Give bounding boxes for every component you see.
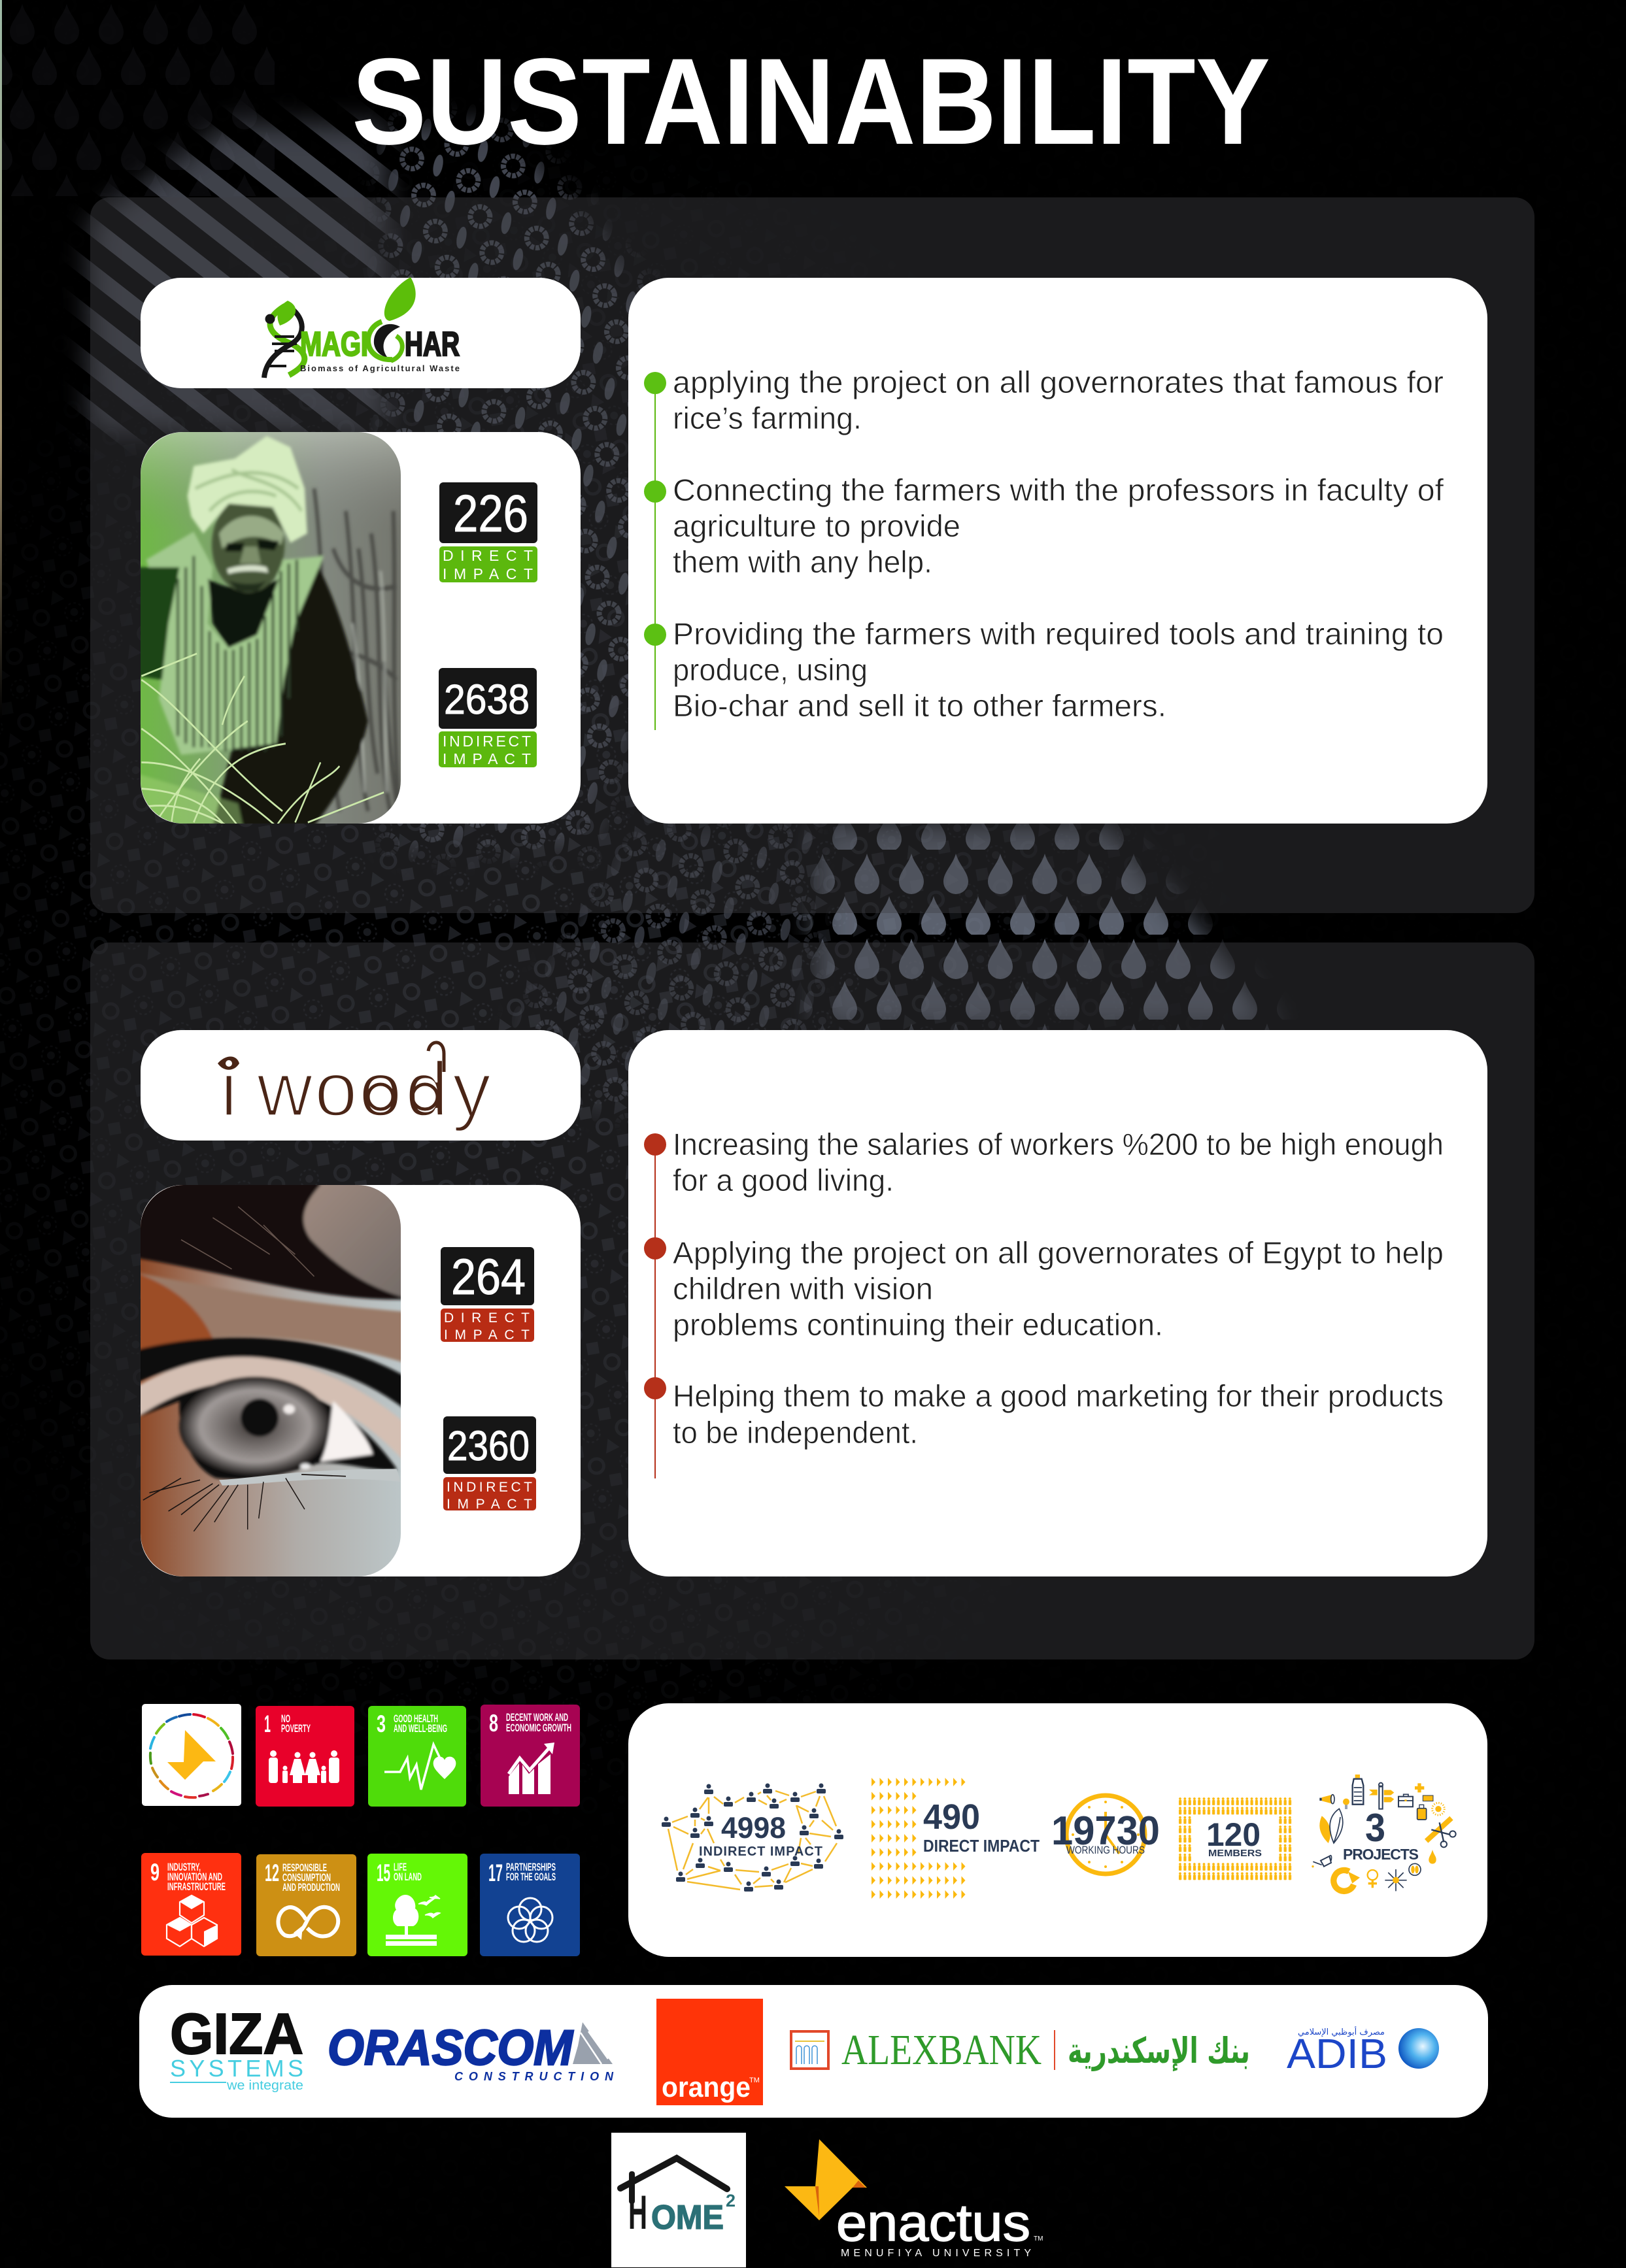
SDG tile 1: no poverty bbox=[256, 1706, 354, 1807]
bullet text 2: Applying the project on all governorates of Egypt to help bbox=[673, 1235, 1444, 1270]
bullet text 3 bbox=[673, 1378, 1444, 1450]
SDG tile 17: partnerships: FOR THE GOALS bbox=[506, 1871, 556, 1883]
logo: Home squared: H bbox=[628, 2186, 647, 2239]
stat: 19730 working hours: WORKING HOURS bbox=[1066, 1844, 1145, 1856]
SDG tile 8: decent work: ECONOMIC GROWTH bbox=[506, 1722, 571, 1734]
bullet text 2: agriculture to provide bbox=[673, 509, 960, 543]
stat: 2638 indirect impact bbox=[439, 668, 537, 767]
SDG tile 15: life on land: 15 bbox=[377, 1859, 390, 1886]
logo tagline: Biomass of Agricultural Waste bbox=[300, 363, 460, 373]
logo eye bbox=[218, 1056, 239, 1070]
bullet text 1: rice’s farming. bbox=[673, 401, 862, 435]
photo: eye bbox=[137, 1181, 422, 1576]
bullet text 3: Helping them to make a good marketing for their products bbox=[673, 1378, 1444, 1413]
stat: 4998 indirect impact network: INDIRECT IMPACT bbox=[699, 1844, 822, 1859]
bullet text 2: children with vision bbox=[673, 1271, 933, 1306]
logo card: iWoody bbox=[141, 1030, 581, 1141]
logo: Orascom: ORASCOM bbox=[328, 2020, 574, 2076]
enactus origami mark bbox=[785, 2139, 867, 2220]
stat: 120 members: 120 bbox=[1206, 1816, 1261, 1853]
stat: 490 direct impact: 490 bbox=[923, 1797, 980, 1837]
logo: Home squared bbox=[611, 2133, 746, 2267]
network lines bbox=[668, 1791, 837, 1890]
bullet text 2: problems continuing their education. bbox=[673, 1307, 1163, 1342]
SDG tile 9: industry: INNOVATION AND bbox=[167, 1871, 222, 1883]
logo: ADIB bbox=[1287, 2026, 1439, 2077]
bullet text 2 bbox=[673, 473, 1444, 579]
SDG tile 9: industry bbox=[141, 1853, 241, 1956]
SDG tile 17: partnerships: 17 bbox=[488, 1859, 503, 1886]
panel: iWoody project bbox=[137, 1030, 1487, 1576]
SDG tile 8: decent work bbox=[481, 1705, 580, 1807]
logo: Orascom: CONSTRUCTION bbox=[454, 2070, 614, 2083]
stat: 226 direct impact: 226 bbox=[453, 484, 528, 542]
bullet text 3: produce, using bbox=[673, 652, 868, 687]
panel: Magichar project bbox=[137, 277, 1487, 833]
logo inner rings and hook bbox=[368, 1042, 444, 1109]
logo: Alexbank: ALEXBANK bbox=[841, 2026, 1042, 2074]
bullet text 1 bbox=[673, 1127, 1444, 1197]
logo: Giza Systems bbox=[170, 2001, 303, 2093]
text card: iWoody sustainability plan bbox=[628, 1030, 1487, 1576]
stats card bbox=[628, 1703, 1487, 1957]
logo wordmark end: HAR bbox=[405, 325, 460, 363]
logo: Alexbank: بنك الإسكندرية bbox=[1068, 2030, 1250, 2071]
page background with textile pattern bbox=[0, 0, 1284, 1699]
logo: Home squared: OME bbox=[651, 2199, 724, 2237]
stat: 226 direct impact: DIRECT bbox=[443, 547, 533, 564]
SDG tile 12: responsible consumption: 12 bbox=[265, 1859, 279, 1886]
bullet text 3: Bio-char and sell it to other farmers. bbox=[673, 688, 1166, 723]
bullet text 1: Increasing the salaries of workers %200 to be high enough bbox=[673, 1127, 1444, 1161]
stat: 4998 indirect impact network bbox=[662, 1783, 843, 1892]
logo: Giza Systems: we integrate bbox=[226, 2078, 303, 2093]
stat: 226 direct impact: IMPACT bbox=[443, 565, 533, 582]
stat: 4998 indirect impact network: 4998 bbox=[721, 1811, 786, 1844]
SDG tile 12: responsible consumption: AND PRODUCTION bbox=[282, 1881, 340, 1893]
SDG tile 9: industry: INFRASTRUCTURE bbox=[167, 1880, 226, 1893]
logo card: Magichar bbox=[141, 277, 581, 388]
bullet text 3: Providing the farmers with required tools and training to bbox=[673, 616, 1444, 651]
bullet text 3: to be independent. bbox=[673, 1415, 918, 1450]
bullet text 2: them with any help. bbox=[673, 544, 932, 579]
stat: 264 direct impact: IMPACT bbox=[444, 1327, 530, 1342]
stat: 2360 indirect impact: IMPACT bbox=[447, 1497, 532, 1512]
SDG tile 8: decent work: 8 bbox=[489, 1710, 498, 1737]
stat: 2360 indirect impact bbox=[443, 1416, 536, 1512]
logo: Enactus Menufiya University: enactus bbox=[836, 2193, 1030, 2252]
bullet text 2: Connecting the farmers with the professors in faculty of bbox=[673, 473, 1444, 507]
logo: Giza Systems: GIZA bbox=[170, 2001, 303, 2066]
stat: 120 members bbox=[1178, 1797, 1293, 1882]
logo wordmark: MAGI bbox=[300, 325, 368, 363]
logo: ADIB: مصرف أبوظبي الإسلامي bbox=[1298, 2026, 1385, 2037]
SDG tile: enactus goals wheel bbox=[142, 1704, 241, 1806]
stat: 490 direct impact bbox=[872, 1778, 1040, 1905]
SDG tile 15: life on land: ON LAND bbox=[394, 1871, 422, 1883]
logo: Orange: orange bbox=[662, 2071, 751, 2103]
bullet text 1: applying the project on all governorates that famous for bbox=[673, 365, 1444, 399]
SDG tile 3: good health bbox=[368, 1706, 466, 1807]
SDG tile 3: good health: AND WELL-BEING bbox=[394, 1722, 447, 1735]
logo: Alexbank bbox=[791, 2026, 1250, 2074]
stat: 3 projects with icons: 3 bbox=[1365, 1806, 1385, 1850]
network people bbox=[662, 1783, 843, 1892]
text card: Magichar sustainability plan bbox=[628, 278, 1487, 824]
SDG tile 3: good health: 3 bbox=[377, 1710, 386, 1737]
stat: 2360 indirect impact: INDIRECT bbox=[447, 1480, 532, 1495]
logo leaf bbox=[384, 277, 416, 321]
logo DNA helix bbox=[264, 301, 305, 378]
logo C mark bbox=[368, 322, 402, 361]
stat: 264 direct impact bbox=[441, 1247, 534, 1342]
bullet text 1: for a good living. bbox=[673, 1163, 894, 1197]
logo wordmark: i woody bbox=[220, 1046, 491, 1133]
bullet text 2 bbox=[673, 1235, 1444, 1342]
stat card: Magichar bbox=[137, 432, 581, 833]
stat: 3 projects with icons bbox=[1312, 1775, 1456, 1891]
SDG tile 17: partnerships bbox=[480, 1854, 580, 1956]
SDG tile 12: responsible consumption: CONSUMPTION bbox=[282, 1871, 331, 1884]
stat: 490 direct impact: DIRECT IMPACT bbox=[923, 1836, 1040, 1856]
panel: iWoody background bbox=[90, 942, 1534, 1659]
SDG tiles bbox=[141, 1704, 580, 1956]
logo: Orange: TM bbox=[749, 2076, 760, 2084]
stat: 3 projects with icons: PROJECTS bbox=[1343, 1846, 1419, 1863]
stat: 2638 indirect impact: INDIRECT bbox=[443, 733, 531, 750]
SDG tile 12: responsible consumption: RESPONSIBLE bbox=[282, 1861, 327, 1874]
SDG tile 15: life on land bbox=[367, 1854, 467, 1956]
title: SUSTAINABILITY bbox=[352, 33, 1270, 170]
SDG tile 1: no poverty: NO bbox=[281, 1712, 290, 1725]
logo: ADIB: ADIB bbox=[1287, 2030, 1387, 2077]
stat: 2360 indirect impact: 2360 bbox=[447, 1422, 530, 1469]
SDG tile 12: responsible consumption bbox=[256, 1854, 356, 1956]
panel: Magichar background bbox=[90, 197, 1534, 913]
stat: 264 direct impact: DIRECT bbox=[444, 1310, 530, 1326]
SDG tile 9: industry: 9 bbox=[150, 1859, 160, 1886]
SDG tile 17: partnerships: PARTNERSHIPS bbox=[506, 1861, 556, 1873]
SDG tile 3: good health: GOOD HEALTH bbox=[394, 1712, 438, 1725]
SDG tile 9: industry: INDUSTRY, bbox=[167, 1861, 201, 1873]
logo: Enactus Menufiya University: MENUFIYA UNIVERSITY bbox=[841, 2248, 1031, 2259]
project icons bbox=[1312, 1775, 1456, 1891]
logo: Orange bbox=[656, 1999, 763, 2105]
partners card bbox=[139, 1985, 1488, 2118]
stat: 226 direct impact bbox=[439, 482, 537, 582]
logo: Home squared: 2 bbox=[726, 2191, 736, 2210]
bullet timeline bbox=[644, 1133, 666, 1478]
SDG tile 8: decent work: DECENT WORK AND bbox=[506, 1711, 568, 1724]
logo: Giza Systems: SYSTEMS bbox=[170, 2055, 303, 2082]
bullet text 1 bbox=[673, 365, 1444, 435]
stat: 120 members: MEMBERS bbox=[1208, 1848, 1262, 1859]
logo: Enactus Menufiya University: TM bbox=[1034, 2235, 1043, 2243]
SDG tile 15: life on land: LIFE bbox=[394, 1861, 407, 1873]
stat: 19730 working hours: 19730 bbox=[1051, 1809, 1160, 1854]
photo: farmer bbox=[137, 432, 401, 833]
SDG tile 1: no poverty: 1 bbox=[264, 1710, 271, 1737]
logo: Enactus Menufiya University bbox=[785, 2139, 1043, 2259]
stat: 19730 working hours bbox=[1051, 1795, 1160, 1874]
SDG tile 1: no poverty: POVERTY bbox=[281, 1722, 311, 1735]
bullet timeline bbox=[644, 372, 666, 730]
stat: 2638 indirect impact: 2638 bbox=[444, 676, 530, 723]
bullet text 3 bbox=[673, 616, 1444, 723]
stat: 264 direct impact: 264 bbox=[451, 1249, 526, 1305]
stat: 2638 indirect impact: IMPACT bbox=[443, 750, 531, 767]
stat card: iWoody bbox=[137, 1181, 581, 1576]
